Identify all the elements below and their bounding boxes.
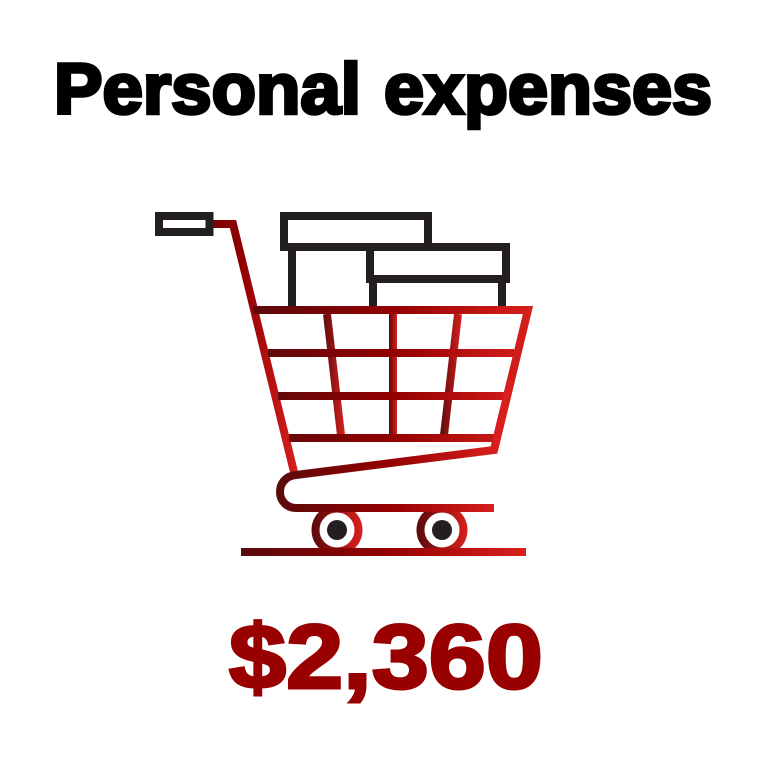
amount: $2,360 xyxy=(229,607,543,708)
title: expenses xyxy=(384,50,712,129)
title xyxy=(54,50,712,129)
boxes in cart xyxy=(280,216,506,306)
wheels xyxy=(316,508,464,552)
ground line xyxy=(241,548,526,556)
icon: shopping cart xyxy=(159,216,528,556)
cart handle grip xyxy=(159,216,210,232)
title: Personal xyxy=(54,50,361,129)
cart handle bar and back frame xyxy=(213,224,294,472)
basket grid xyxy=(253,310,528,450)
cart lower frame xyxy=(280,380,511,508)
